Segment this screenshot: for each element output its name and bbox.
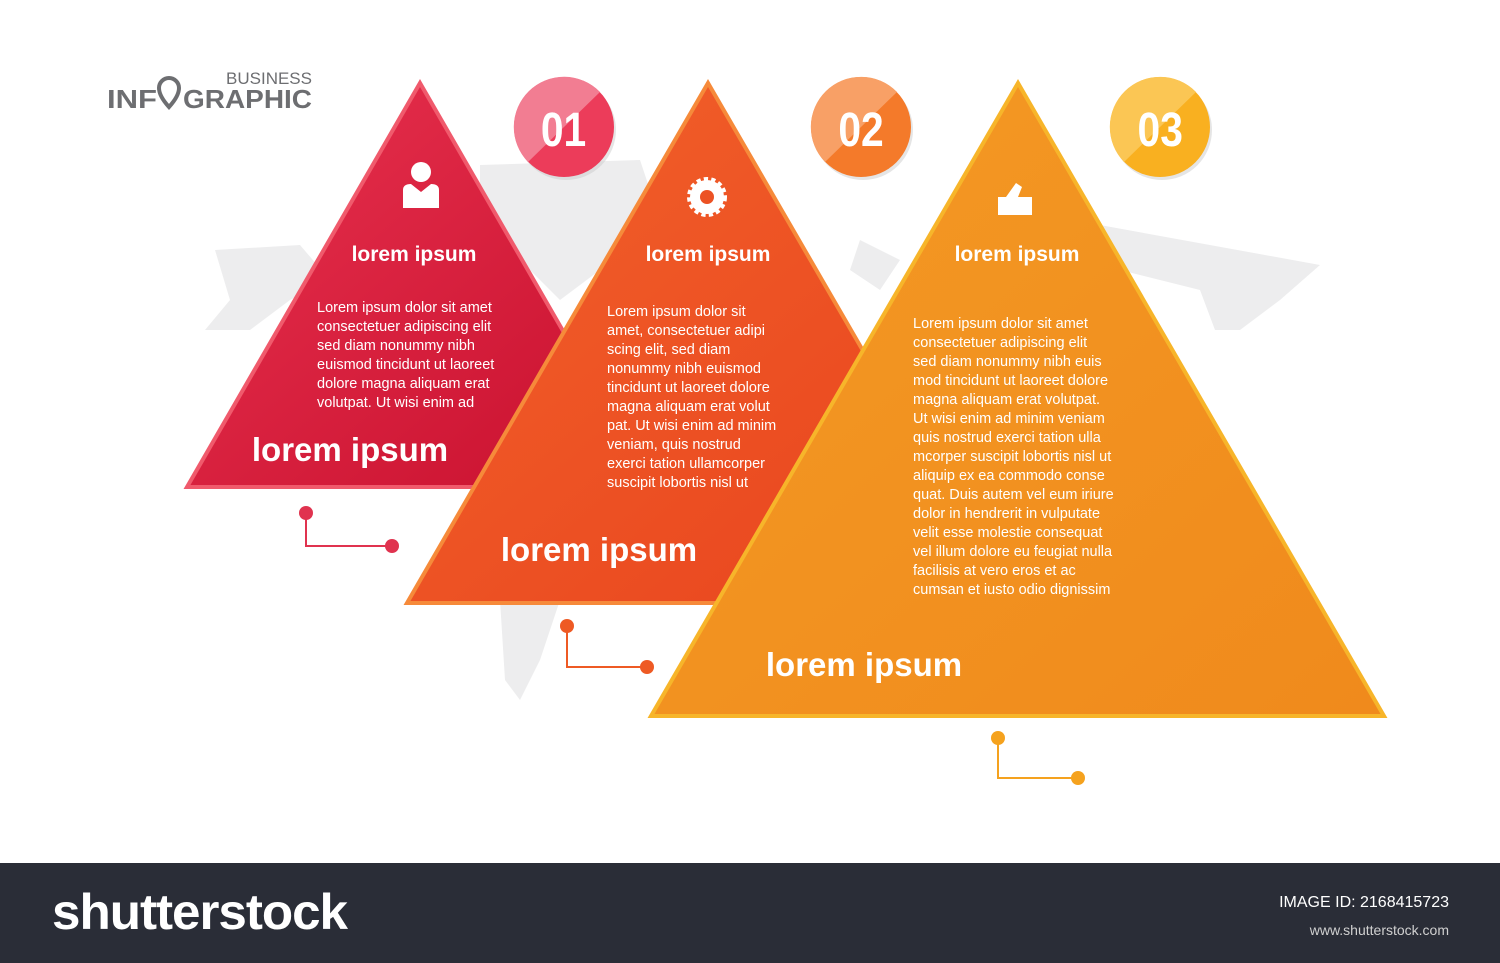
- panel 2 triangle: nonummy nibh euismod: [607, 361, 761, 377]
- panel 3 triangle: dolor in hendrerit in vulputate: [913, 506, 1100, 522]
- panel 2 triangle: scing elit, sed diam: [607, 342, 730, 358]
- panel 1 triangle: euismod tincidunt ut laoreet: [317, 357, 494, 373]
- panel 1 triangle: [187, 83, 653, 487]
- panel 3 triangle: vel illum dolore eu feugiat nulla: [913, 544, 1113, 560]
- number badge 03: 03: [1138, 104, 1183, 157]
- icon: hand: [998, 183, 1032, 215]
- world map background: [205, 160, 1320, 700]
- panel 3 triangle: [651, 83, 1384, 716]
- panel 3 triangle: quis nostrud exerci tation ulla: [913, 430, 1102, 446]
- panel 3 triangle: Lorem ipsum dolor sit amet: [913, 316, 1088, 332]
- connector 1: [299, 506, 399, 553]
- logo: INF: [107, 84, 157, 114]
- panel 3 triangle: mod tincidunt ut laoreet dolore: [913, 373, 1108, 389]
- number badge 01: 01: [541, 104, 586, 157]
- connector 3: [991, 731, 1085, 785]
- panel 2 triangle: suscipit lobortis nisl ut: [607, 475, 748, 491]
- panel 2 triangle: lorem ipsum: [646, 243, 770, 266]
- panel 2 triangle: lorem ipsum: [501, 531, 697, 568]
- panel 2 triangle: tincidunt ut laoreet dolore: [607, 380, 770, 396]
- panel 2 triangle: [407, 83, 1009, 603]
- panel 1 triangle: Lorem ipsum dolor sit amet: [317, 300, 492, 316]
- icon: gear: [690, 180, 724, 214]
- panel 2 triangle: Lorem ipsum dolor sit: [607, 304, 746, 320]
- logo: [107, 69, 312, 114]
- logo: BUSINESS: [226, 69, 312, 88]
- number badge 02: [811, 77, 913, 180]
- panel 3 triangle: aliquip ex ea commodo conse: [913, 468, 1105, 484]
- panel 3 triangle: facilisis at vero eros et ac: [913, 563, 1076, 579]
- panel 3 triangle: cumsan et iusto odio dignissim: [913, 582, 1110, 598]
- footer bar: www.shutterstock.com: [1309, 922, 1449, 938]
- panel 3 triangle: quat. Duis autem vel eum iriure: [913, 487, 1114, 503]
- panel 2 triangle: pat. Ut wisi enim ad minim: [607, 418, 776, 434]
- panel 3 triangle: sed diam nonummy nibh euis: [913, 354, 1102, 370]
- panel 1 triangle: lorem ipsum: [252, 431, 448, 468]
- panel 1 triangle: sed diam nonummy nibh: [317, 338, 475, 354]
- panel 3 triangle: lorem ipsum: [955, 243, 1079, 266]
- icon: person: [403, 162, 439, 208]
- panel 3 triangle: velit esse molestie consequat: [913, 525, 1102, 541]
- number badge 01: [514, 77, 616, 180]
- connector 2: [560, 619, 654, 674]
- panel 3 triangle: Ut wisi enim ad minim veniam: [913, 411, 1105, 427]
- footer bar: [0, 863, 1500, 963]
- panel 1 triangle: volutpat. Ut wisi enim ad: [317, 395, 474, 411]
- panel 3 triangle: magna aliquam erat volutpat.: [913, 392, 1100, 408]
- logo: GRAPHIC: [183, 84, 312, 114]
- panel 1 triangle: consectetuer adipiscing elit: [317, 319, 491, 335]
- panel 2 triangle: veniam, quis nostrud: [607, 437, 741, 453]
- number badge 02: 02: [838, 104, 884, 157]
- footer bar: shutterstock: [52, 884, 348, 940]
- panel 3 triangle: lorem ipsum: [766, 646, 962, 683]
- panel 3 triangle: mcorper suscipit lobortis nisl ut: [913, 449, 1111, 465]
- panel 2 triangle: exerci tation ullamcorper: [607, 456, 765, 472]
- panel 3 triangle: consectetuer adipiscing elit: [913, 335, 1087, 351]
- footer bar: IMAGE ID: 2168415723: [1279, 894, 1449, 911]
- number badge 03: [1110, 77, 1212, 180]
- panel 2 triangle: amet, consectetuer adipi: [607, 323, 765, 339]
- panel 2 triangle: magna aliquam erat volut: [607, 399, 770, 415]
- panel 1 triangle: dolore magna aliquam erat: [317, 376, 490, 392]
- panel 1 triangle: lorem ipsum: [352, 243, 476, 266]
